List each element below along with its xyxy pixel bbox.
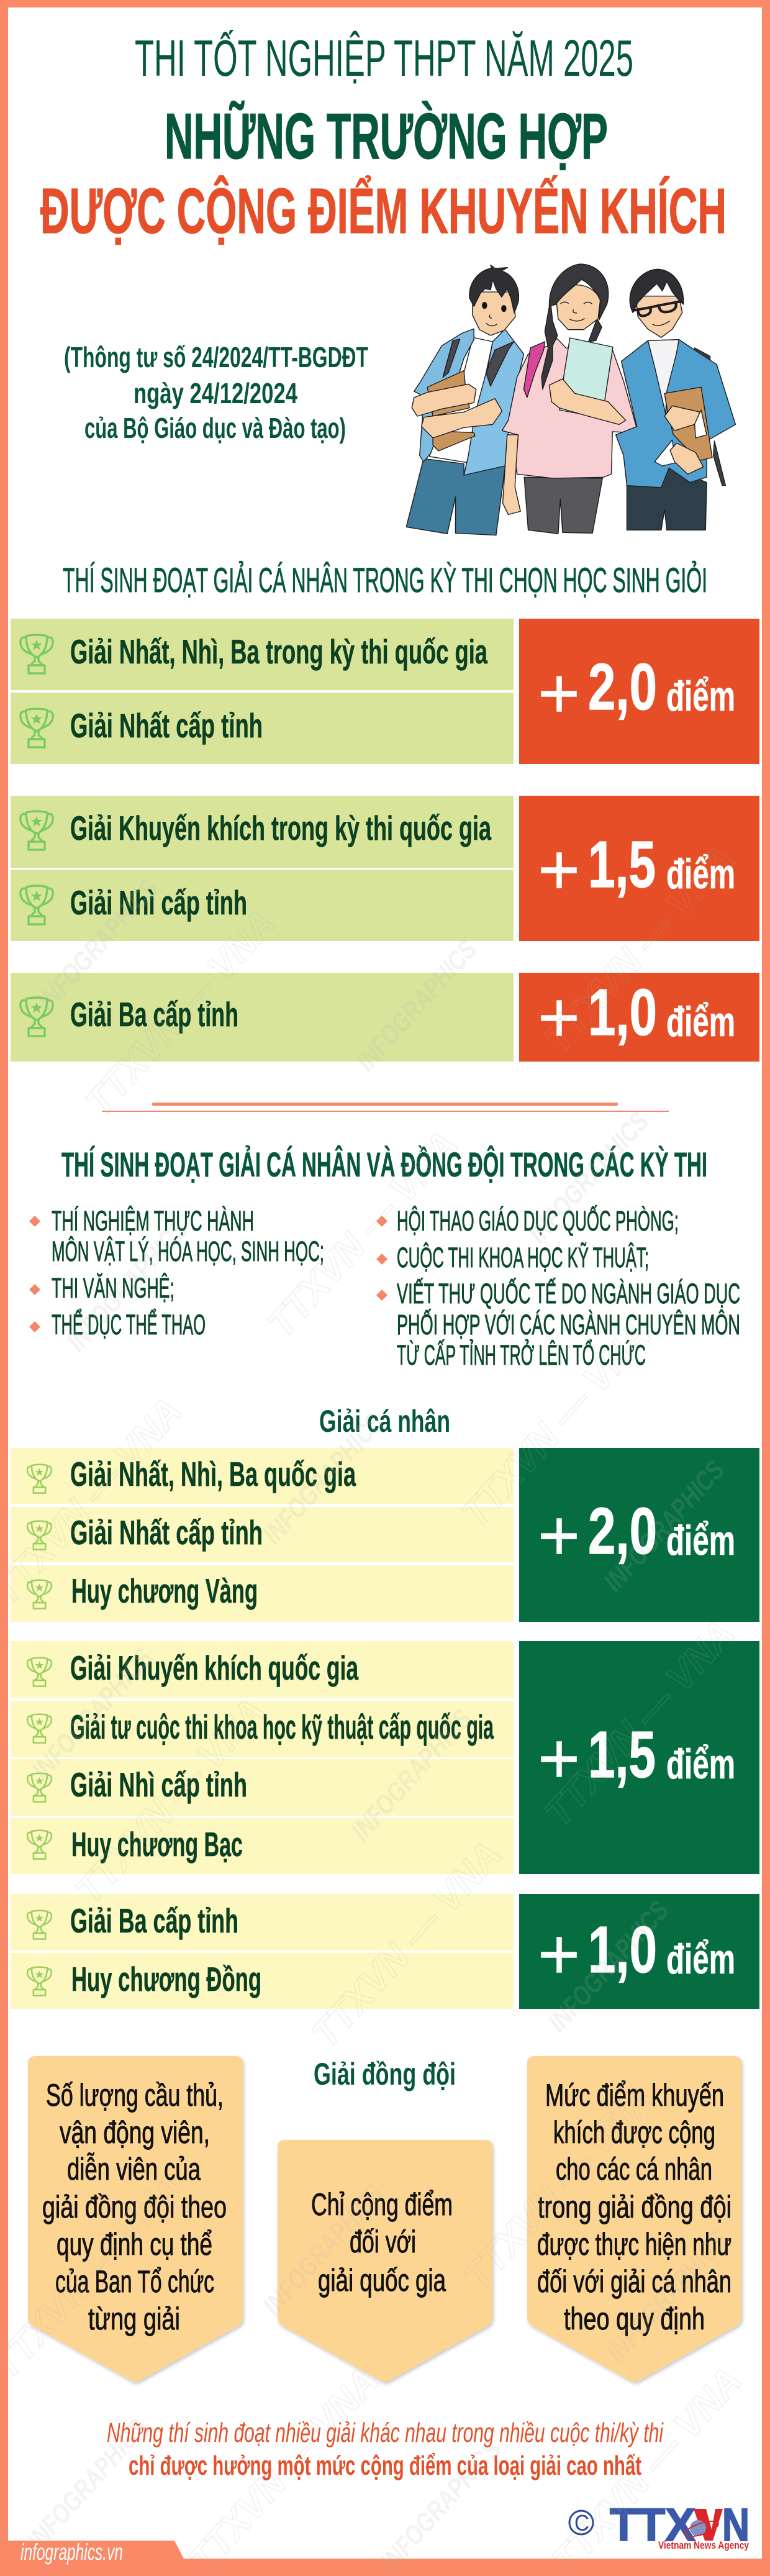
logo: TTXVN: Vietnam News Agency (658, 2539, 749, 2551)
panel: section 1 rows +1,0 (11, 973, 759, 1062)
row (11, 1953, 514, 2009)
legal source text: của Bộ Giáo dục và Đào tạo) (84, 412, 346, 444)
icon: trophy (20, 635, 53, 673)
subheading: team prizes: Giải đồng đội (314, 2057, 456, 2091)
text: INFOGRAPHICS (257, 1408, 390, 1550)
text: INFOGRAPHICS (21, 2413, 154, 2556)
score box +1,0: điểm (666, 998, 735, 1045)
text: TTXVN — VNA (78, 901, 284, 1124)
list: competitions left column: THÍ NGHIỆM THỰC HÀNH (52, 1205, 254, 1237)
text: TTXVN — VNA (456, 2075, 662, 2298)
score box +2,0: điểm (666, 673, 735, 720)
row: Huy chương Vàng (71, 1572, 258, 1610)
callout: number of team members: của Ban Tổ chức (55, 2264, 214, 2299)
header: title block (40, 29, 727, 247)
row: national consolation (11, 796, 514, 868)
icon: trophy (27, 1911, 52, 1939)
row: Giải Nhất cấp tỉnh (70, 1513, 263, 1552)
subheading: individual prizes: Giải cá nhân (319, 1404, 450, 1439)
logo: TTXVN (569, 2499, 750, 2551)
panel: individual rows +2,0 (11, 1448, 759, 1622)
icon: trophy (27, 1714, 52, 1743)
score box +2,0 (519, 619, 759, 764)
score box +1,5: điểm (666, 1741, 735, 1788)
text: INFOGRAPHICS (374, 2434, 507, 2576)
text: TTXVN — VNA (544, 2359, 750, 2576)
closing note (107, 2418, 664, 2481)
score box +1,0 (519, 973, 759, 1062)
text: INFOGRAPHICS (257, 2178, 390, 2321)
text: INFOGRAPHICS (598, 1455, 731, 1598)
icon: trophy (20, 811, 53, 850)
text: INFOGRAPHICS (600, 2225, 733, 2368)
score box +2,0 (519, 1448, 759, 1622)
text: TTXVN — VNA (260, 1123, 466, 1345)
icon: trophy (27, 1580, 52, 1609)
footer tab: infographics.vn: infographics.vn (20, 2539, 123, 2565)
score box +1,0: 1,0 (588, 1913, 657, 1987)
text: TTXVN — VNA (68, 1690, 274, 1912)
row: province first: Giải Nhất cấp tỉnh (70, 706, 263, 745)
logo: TTXVN: C (574, 2510, 589, 2536)
row (11, 1448, 514, 1504)
legal source text: (Thông tư số 24/2024/TT-BGDĐT (64, 341, 368, 373)
row (11, 1565, 514, 1622)
score box +2,0: 2,0 (588, 1495, 657, 1568)
score box +1,5: 1,5 (588, 1718, 656, 1791)
logo: TTXVN: N (722, 2499, 750, 2551)
score box +1,0: 1,0 (588, 976, 657, 1049)
score box +1,5 (519, 796, 759, 941)
icon: trophy (27, 1773, 52, 1802)
illustration: three students (406, 264, 735, 535)
row: province first (11, 693, 514, 764)
icon: trophy (27, 1658, 52, 1686)
callout: national prizes only: đối với (350, 2224, 416, 2259)
score box +2,0: điểm (666, 1517, 735, 1564)
row (11, 1818, 514, 1874)
middle student (502, 264, 637, 534)
row: Giải Ba cấp tỉnh (70, 1901, 238, 1940)
row: province third (11, 973, 514, 1062)
list: competitions left column: MÔN VẬT LÝ, HÓA HỌC, SINH HỌC; (52, 1236, 324, 1267)
callout: number of team members: diễn viên của (67, 2152, 201, 2187)
callout: number of team members: Số lượng cầu thủ, (46, 2078, 224, 2113)
callout: number of team members: từng giải (88, 2301, 180, 2336)
row: province second (11, 870, 514, 941)
row (11, 1641, 514, 1698)
score box +2,0: 2,0 (588, 650, 657, 724)
score box +1,5 (519, 1641, 759, 1874)
row: national first second third: Giải Nhất, Nhì, Ba trong kỳ thi quốc gia (70, 632, 487, 671)
icon: trophy (27, 1521, 52, 1550)
row (11, 1759, 514, 1816)
text: TTXVN — VNA (537, 838, 743, 1060)
text: INFOGRAPHICS (350, 934, 483, 1077)
callout: number of team members: vận động viên, (60, 2115, 210, 2150)
row: province third: Giải Ba cấp tỉnh (70, 995, 238, 1034)
text: INFOGRAPHICS (61, 1214, 194, 1357)
list: competitions left column: THỂ DỤC THỂ THAO (52, 1309, 206, 1340)
row (11, 1701, 514, 1757)
text: TTXVN — VNA (304, 1833, 510, 2055)
score box +1,5: điểm (666, 850, 735, 898)
icon: trophy (27, 1967, 52, 1996)
callout: number of team members: quy định cụ thể (57, 2227, 212, 2262)
panel: section 1 rows +1,5 (11, 796, 759, 941)
legal source text: ngày 24/12/2024 (134, 377, 297, 409)
list: competitions left column: THI VĂN NGHỆ; (52, 1272, 174, 1304)
row: national first second third (11, 619, 514, 690)
row: national consolation: Giải Khuyến khích trong kỳ thi quốc gia (70, 809, 491, 847)
icon: trophy (20, 709, 53, 747)
list: competitions left column (29, 1205, 324, 1340)
callout: bonus point level (527, 2056, 741, 2382)
text: INFOGRAPHICS (542, 1895, 675, 2038)
score box +1,0 (519, 1894, 759, 2009)
text: INFOGRAPHICS (26, 1643, 159, 1786)
row: Giải Khuyến khích quốc gia (70, 1649, 358, 1687)
row (11, 1894, 514, 1950)
callout: national prizes only: Chỉ cộng điểm (311, 2187, 453, 2222)
left student (406, 265, 523, 535)
right student (616, 269, 735, 530)
row (11, 1507, 514, 1562)
score box +1,0: điểm (666, 1936, 735, 1983)
icon: trophy (27, 1465, 52, 1493)
panel: individual rows +1,0 (11, 1894, 759, 2009)
icon: trophy (20, 886, 53, 924)
panel: section 1 rows +2,0 (11, 619, 759, 764)
text: TTXVN — VNA (453, 1313, 659, 1536)
text: INFOGRAPHICS (522, 1106, 655, 1249)
row: Huy chương Bạc (71, 1825, 243, 1864)
panel: individual rows +1,5 (11, 1641, 759, 1874)
callout: number of team members (28, 2056, 243, 2382)
row: Giải Nhất, Nhì, Ba quốc gia (70, 1455, 356, 1493)
logo: TTXVN: TTX (610, 2499, 695, 2551)
callout: number of team members: giải đồng đội theo (42, 2190, 227, 2224)
text: INFOGRAPHICS (32, 873, 165, 1016)
icon: trophy (20, 998, 53, 1036)
callout: national prizes only (278, 2140, 492, 2382)
text: TTXVN — VNA (181, 2359, 387, 2576)
text: INFOGRAPHICS (345, 1704, 478, 1847)
row: province second: Giải Nhì cấp tỉnh (70, 883, 247, 922)
text: TTXVN — VNA (537, 1612, 743, 1834)
callout: national prizes only: giải quốc gia (318, 2263, 446, 2298)
callout: bonus point level: theo quy định (564, 2301, 705, 2336)
score box +1,5: 1,5 (588, 828, 656, 901)
list: competitions right column (376, 1205, 740, 1371)
row: Huy chương Đồng (71, 1960, 261, 1998)
row: Giải Nhì cấp tỉnh (70, 1765, 247, 1804)
legal source text (64, 341, 368, 444)
icon: trophy (27, 1831, 52, 1859)
